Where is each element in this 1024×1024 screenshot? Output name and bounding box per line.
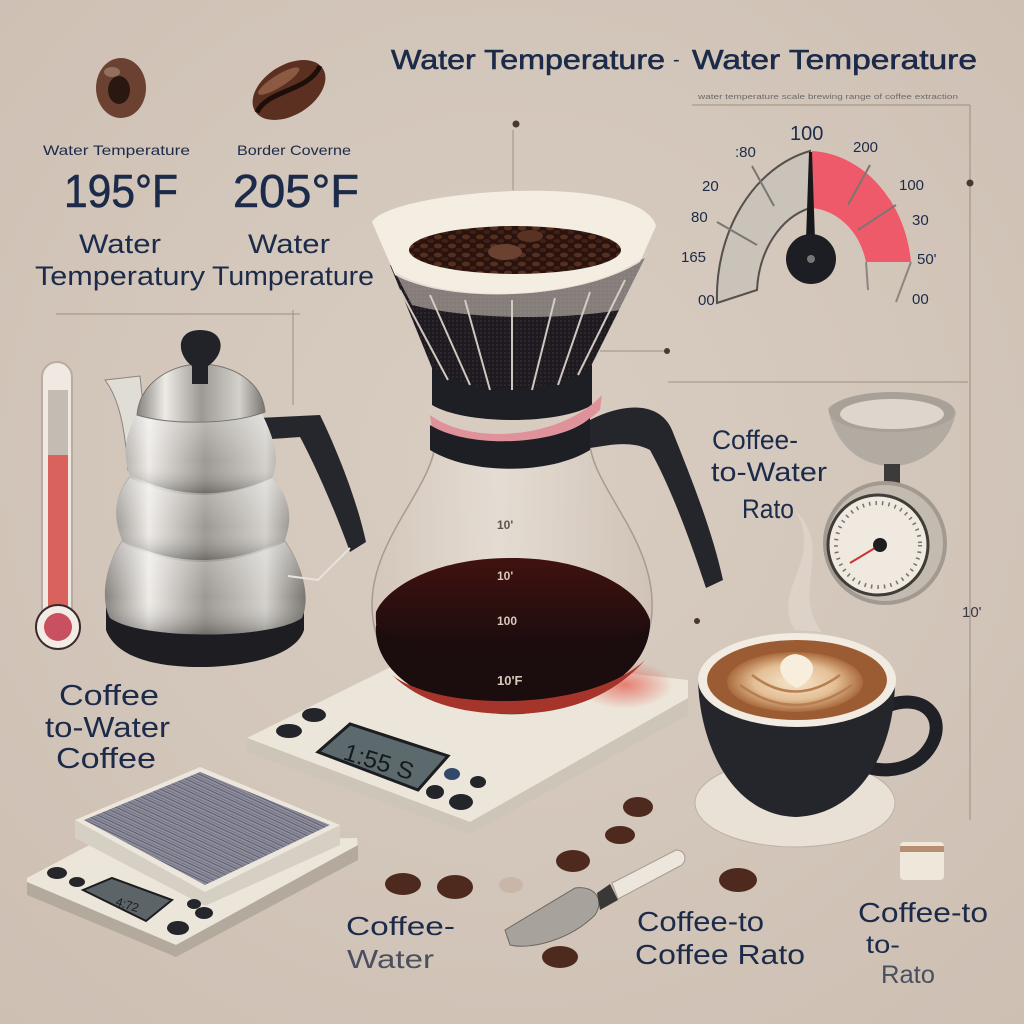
label: coffee-to coffee ratio: Coffee Rato	[635, 939, 805, 970]
small digital scale	[27, 767, 358, 957]
dripper cone	[390, 258, 645, 388]
carafe handle	[590, 408, 723, 588]
carafe markings	[497, 518, 523, 688]
panel: left temperature label: Temperatury	[35, 261, 206, 291]
gauge needle	[806, 152, 815, 240]
small scale display	[83, 878, 172, 921]
label: coffee-to-water ratio right: to-Water	[711, 457, 827, 487]
gauge scale numbers	[681, 123, 937, 309]
gauge scale numbers: 100	[899, 177, 924, 194]
label: coffee to water left: Coffee	[56, 743, 156, 775]
scale display: 1:55 S	[340, 739, 417, 786]
carafe markings: 10'	[497, 518, 513, 532]
cup body	[698, 680, 895, 817]
kettle wire	[288, 548, 350, 580]
kettle lid	[137, 364, 265, 422]
title: -	[673, 49, 680, 71]
label: coffee water bottom: Water	[347, 944, 434, 974]
label: coffee to water left	[45, 680, 170, 775]
paper filter	[372, 191, 656, 294]
scale dish	[828, 393, 956, 466]
scattered beans	[385, 797, 757, 968]
saucer	[695, 759, 895, 847]
scale buttons	[276, 708, 486, 810]
weighing scale	[825, 392, 956, 603]
small scale display: 4:72	[114, 895, 141, 915]
title: Water Temperature	[692, 44, 977, 75]
kettle spout	[105, 376, 150, 470]
marker dots	[198, 120, 974, 662]
carafe markings: 10'F	[497, 673, 523, 688]
label: coffee-to ratio right	[858, 897, 988, 989]
panel: left temperature label: 195°F	[64, 165, 178, 217]
small scale buttons	[47, 867, 213, 935]
label: coffee-to ratio right: to-	[866, 931, 900, 959]
gauge scale numbers: 50'	[917, 251, 937, 268]
cup	[695, 633, 936, 847]
latte	[707, 640, 887, 720]
carafe markings: 10'	[497, 569, 513, 583]
thermometer	[36, 362, 80, 649]
gauge scale numbers: 200	[853, 139, 878, 156]
small jar	[900, 842, 944, 880]
gauge scale numbers: 30	[912, 212, 929, 229]
carafe	[372, 365, 723, 714]
label: coffee-to ratio right: Coffee-to	[858, 897, 988, 928]
kettle base	[106, 600, 304, 667]
icon: round coffee bean	[96, 58, 146, 118]
label: coffee-to ratio right: Rato	[881, 961, 935, 989]
label: coffee-to coffee ratio: Coffee-to	[637, 906, 764, 937]
gauge hub	[786, 234, 836, 284]
gauge scale numbers: 165	[681, 249, 706, 266]
label: coffee to water left: to-Water	[45, 712, 170, 744]
panel: right temperature label: Water	[248, 229, 330, 259]
scoop	[505, 850, 685, 946]
gauge scale numbers: 00	[912, 291, 929, 308]
gauge scale numbers: 20	[702, 178, 719, 195]
panel: right temperature label: 205°F	[233, 165, 359, 217]
gauge caption: water temperature scale brewing range of coffee extraction	[697, 92, 958, 101]
guide lines	[56, 105, 970, 820]
gauge scale numbers: 80	[691, 209, 708, 226]
label: coffee water bottom: Coffee-	[346, 911, 455, 941]
carafe glass	[372, 445, 652, 714]
label: coffee-to coffee ratio	[635, 906, 805, 970]
label: 10 prime: 10'	[962, 604, 982, 621]
panel: left temperature label: Water Temperature	[43, 142, 190, 158]
label: coffee to water left: Coffee	[59, 680, 159, 712]
kettle knob	[181, 330, 221, 384]
kettle	[105, 330, 366, 667]
kettle body	[105, 414, 306, 634]
label: coffee-to-water ratio right	[711, 425, 827, 524]
title: Water Temperature	[391, 44, 665, 75]
gauge scale numbers: 00	[698, 292, 715, 309]
cup handle	[870, 702, 936, 770]
brewed coffee	[376, 558, 650, 714]
dripper	[372, 191, 656, 390]
scale dial	[825, 483, 945, 603]
panel: right temperature label: Tumperature	[212, 261, 374, 291]
kettle handle	[258, 415, 366, 552]
gauge	[681, 123, 937, 309]
panel: right temperature label	[212, 142, 374, 291]
panel: left temperature label: Water	[79, 229, 161, 259]
gauge scale numbers: :80	[735, 144, 756, 161]
coffee grounds	[409, 226, 621, 274]
carafe markings: 100	[497, 614, 517, 628]
panel: right temperature label: Border Coverne	[237, 142, 351, 158]
panel: left temperature label	[35, 142, 206, 291]
label: coffee-to-water ratio right: Rato	[742, 494, 794, 524]
title	[391, 44, 977, 75]
scale display	[318, 724, 448, 790]
icon: coffee bean	[242, 48, 336, 132]
collar	[432, 365, 592, 420]
digital scale under carafe	[247, 650, 688, 834]
label: coffee-to-water ratio right: Coffee-	[712, 425, 798, 455]
gauge scale numbers: 100	[790, 123, 823, 145]
steam	[788, 510, 822, 632]
label: coffee water bottom	[346, 911, 455, 974]
